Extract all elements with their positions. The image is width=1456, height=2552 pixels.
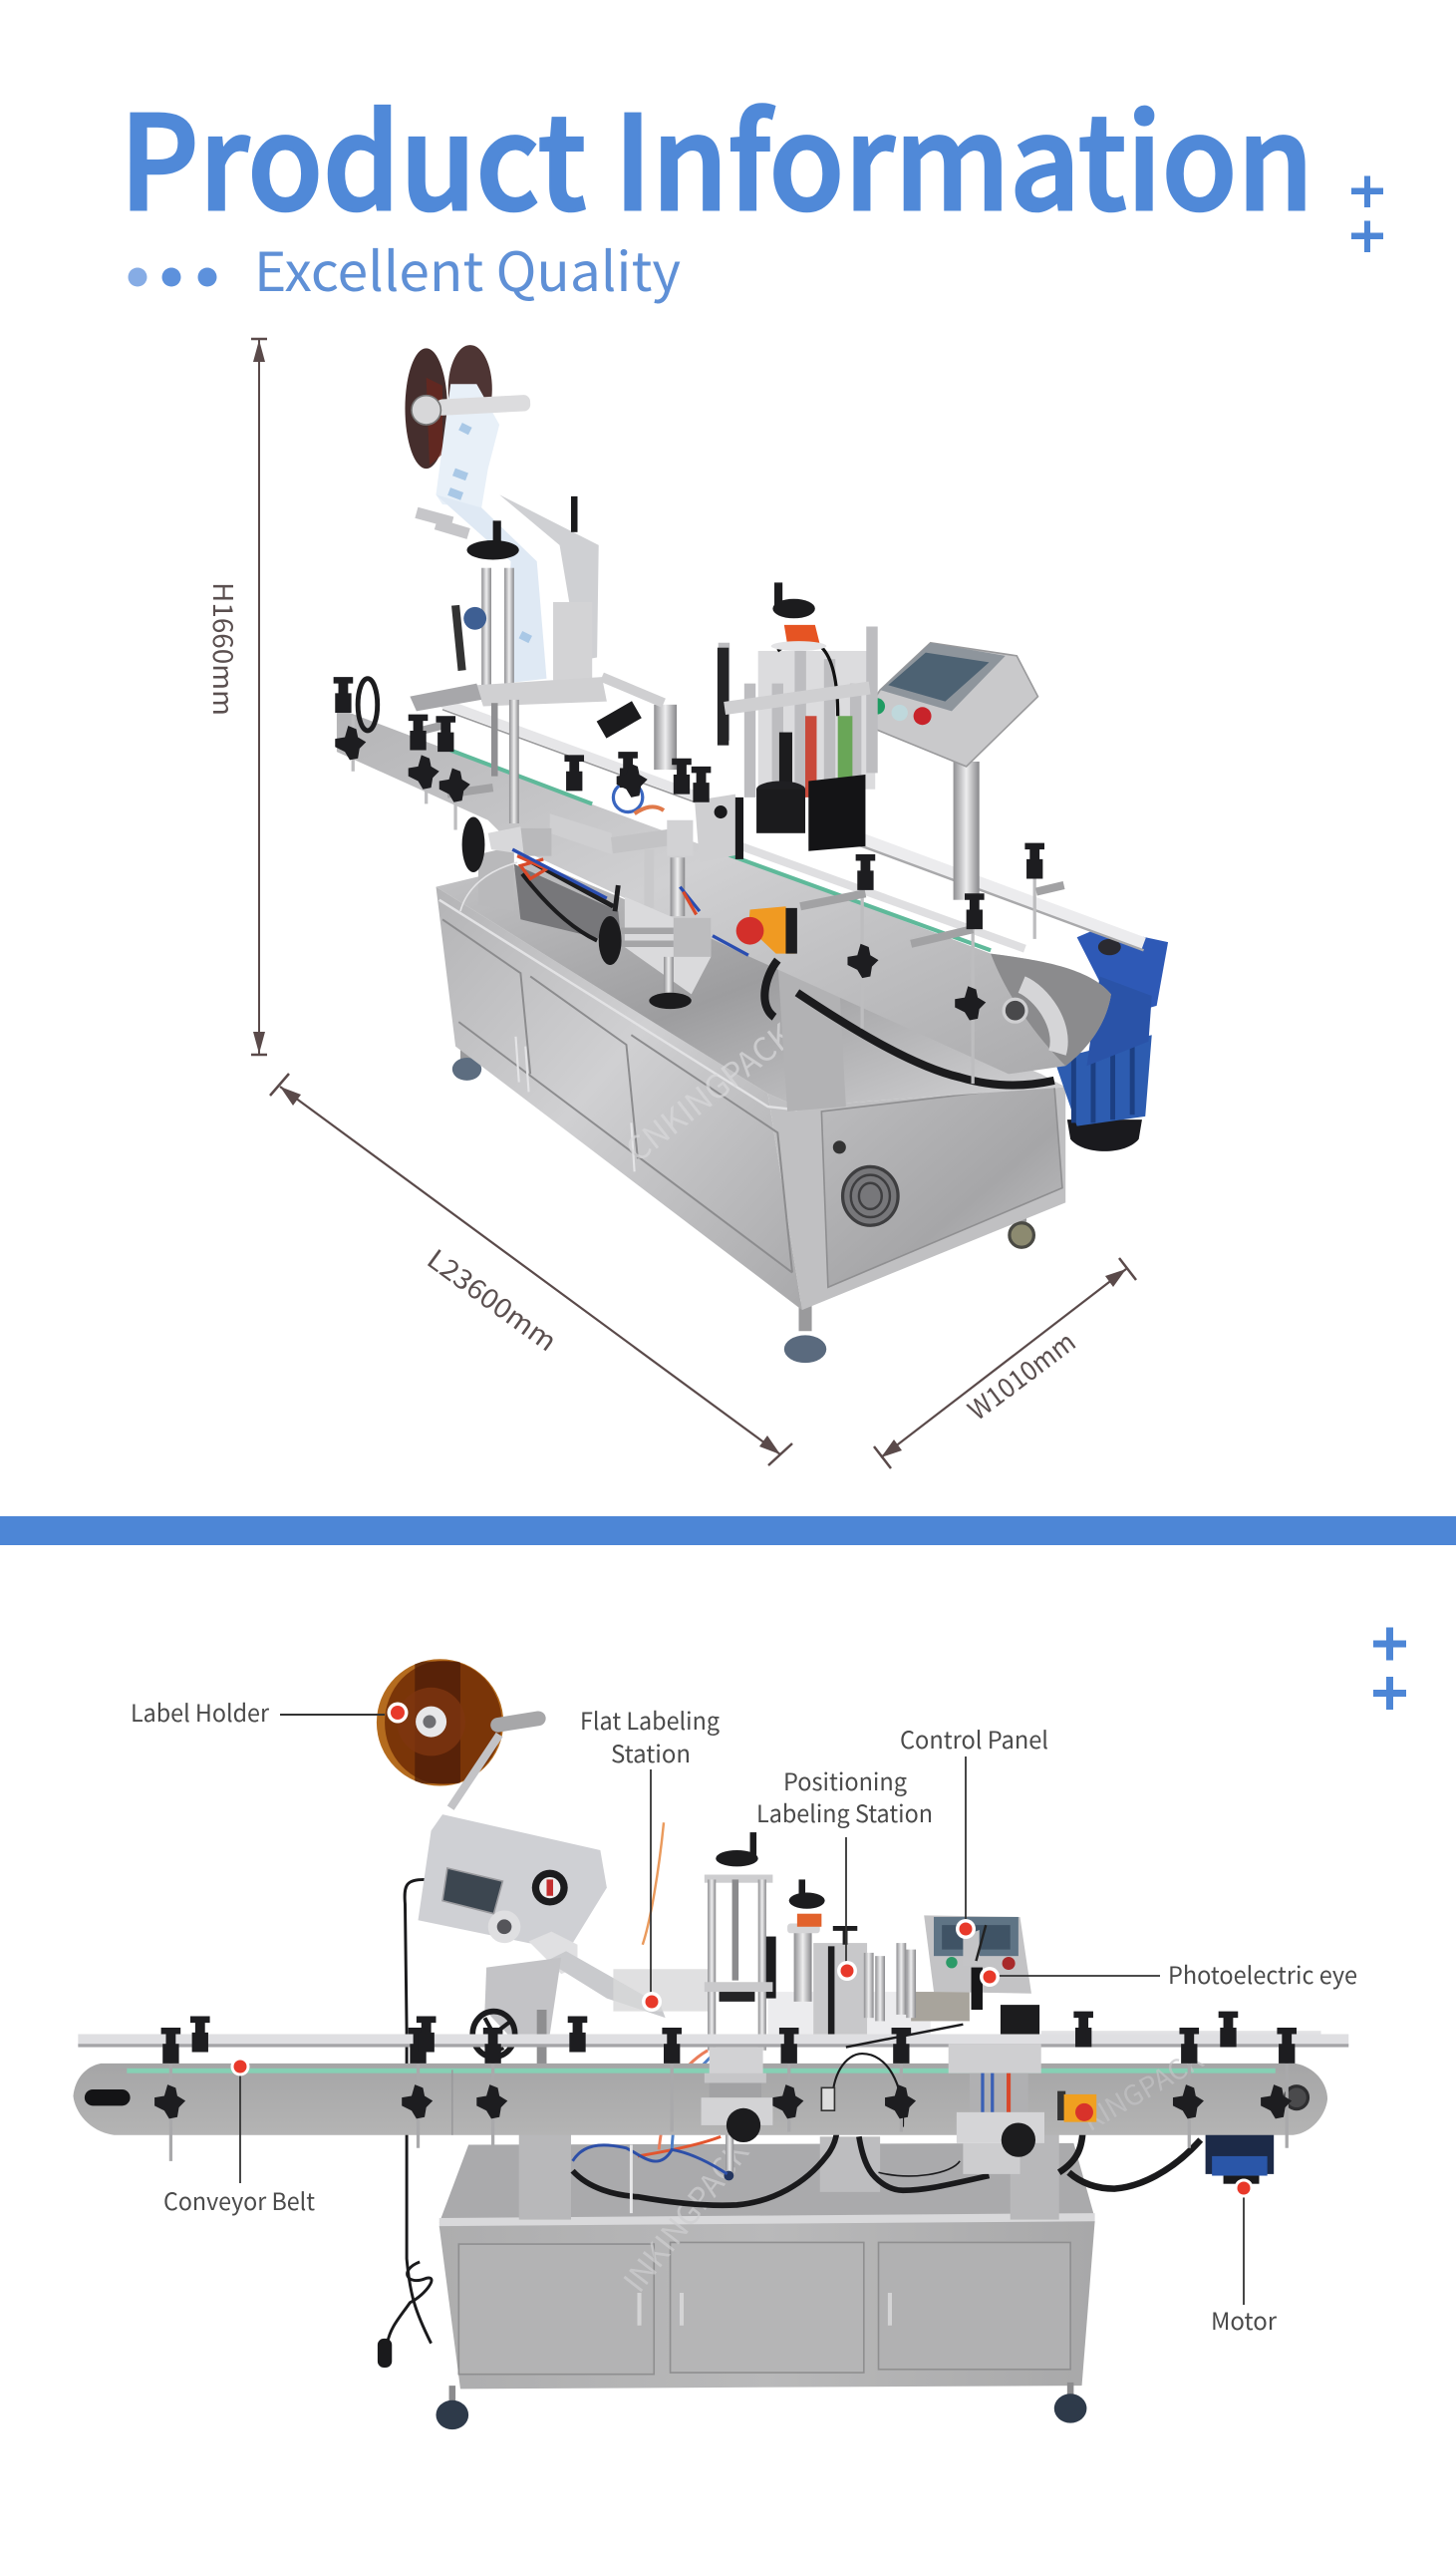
conveyor support leg [777, 957, 846, 1112]
callout: Flat Labeling Station: Flat Labeling [580, 1702, 720, 1737]
positioning labeling station [761, 1879, 970, 2038]
colored wires [573, 2051, 728, 2213]
emergency stop [736, 906, 797, 954]
section band [0, 1516, 1456, 1545]
callout: Photoelectric eye [980, 1956, 1357, 1991]
knobs and rods [154, 2012, 1297, 2161]
dimension: length arrow [270, 1074, 792, 1465]
positioning labeling station [718, 582, 875, 851]
cabinet feet [452, 1042, 1033, 1363]
cabinet: INKINGPACK [611, 2130, 757, 2300]
icon: plus signs top [1351, 175, 1383, 252]
cabinet [439, 2130, 1095, 2389]
decorative dots [128, 267, 217, 287]
callout: Motor: Motor [1211, 2302, 1278, 2337]
control panel [859, 643, 1037, 767]
callout: Flat Labeling Station [580, 1702, 720, 2012]
callout: Control Panel [900, 1721, 1048, 1939]
dimension: length label: L23600mm [421, 1238, 566, 1359]
conveyor belt [337, 708, 1111, 1074]
icon: plus signs lower [1373, 1627, 1406, 1710]
motor [1054, 927, 1168, 1151]
callout: Conveyor Belt: Conveyor Belt [163, 2182, 315, 2217]
black cable under conveyor [797, 993, 1054, 1085]
knobs and rods [334, 677, 1064, 1084]
labeler arm [450, 1719, 538, 1808]
dimension: height arrow [251, 339, 267, 1055]
flat labeling station frame [358, 384, 677, 823]
callout: Conveyor Belt [163, 2058, 315, 2217]
callout: Positioning Labeling Station [756, 1762, 933, 1981]
cabinet [436, 862, 1065, 1310]
rails [78, 2031, 1348, 2048]
callout: Photoelectric eye: Photoelectric eye [1168, 1956, 1357, 1991]
motor [1206, 2131, 1274, 2184]
label reel [377, 1659, 503, 1786]
machine photo: isometric view [334, 345, 1168, 1363]
power cord [379, 1879, 432, 2367]
callout: Positioning Labeling Station: Labeling Station [756, 1794, 933, 1829]
applicator carriage blocks and wheels [460, 783, 777, 1017]
control panel pole [954, 762, 980, 900]
conveyor belt [73, 2038, 1327, 2138]
flat station frame [705, 1832, 772, 2051]
hoses [573, 2123, 1201, 2205]
callout: Control Panel: Control Panel [900, 1721, 1048, 1755]
control panel [924, 1915, 1039, 2034]
callout: Label Holder [131, 1694, 409, 1729]
cabinet feet [436, 2383, 1086, 2429]
support pillars [519, 2127, 1059, 2220]
emergency stop [1057, 2091, 1096, 2122]
dimension: width label: W1010mm [959, 1321, 1082, 1428]
dimension: height label: H1660mm [205, 582, 244, 716]
subtitle: Excellent Quality [254, 228, 681, 307]
rear support panel [478, 846, 622, 944]
callout: Motor [1211, 2179, 1278, 2337]
guide rail [442, 703, 1144, 950]
cabinet: CNKINGPACK [615, 1011, 802, 1171]
labeling head plate [419, 1814, 711, 2066]
label reel discs [405, 345, 492, 469]
callout: Positioning Labeling Station: Positioning [783, 1762, 907, 1797]
conveyor belt: KINGPACK [1074, 2038, 1209, 2138]
cooling fan [833, 1140, 898, 1225]
title: Product Information [120, 60, 1313, 247]
callout: Flat Labeling Station: Station [611, 1735, 691, 1769]
dimension: width arrow [874, 1258, 1136, 1468]
callout: Label Holder: Label Holder [131, 1694, 270, 1729]
machine photo: front view [73, 1659, 1348, 2429]
applicator blocks on conveyor [702, 2025, 1044, 2174]
